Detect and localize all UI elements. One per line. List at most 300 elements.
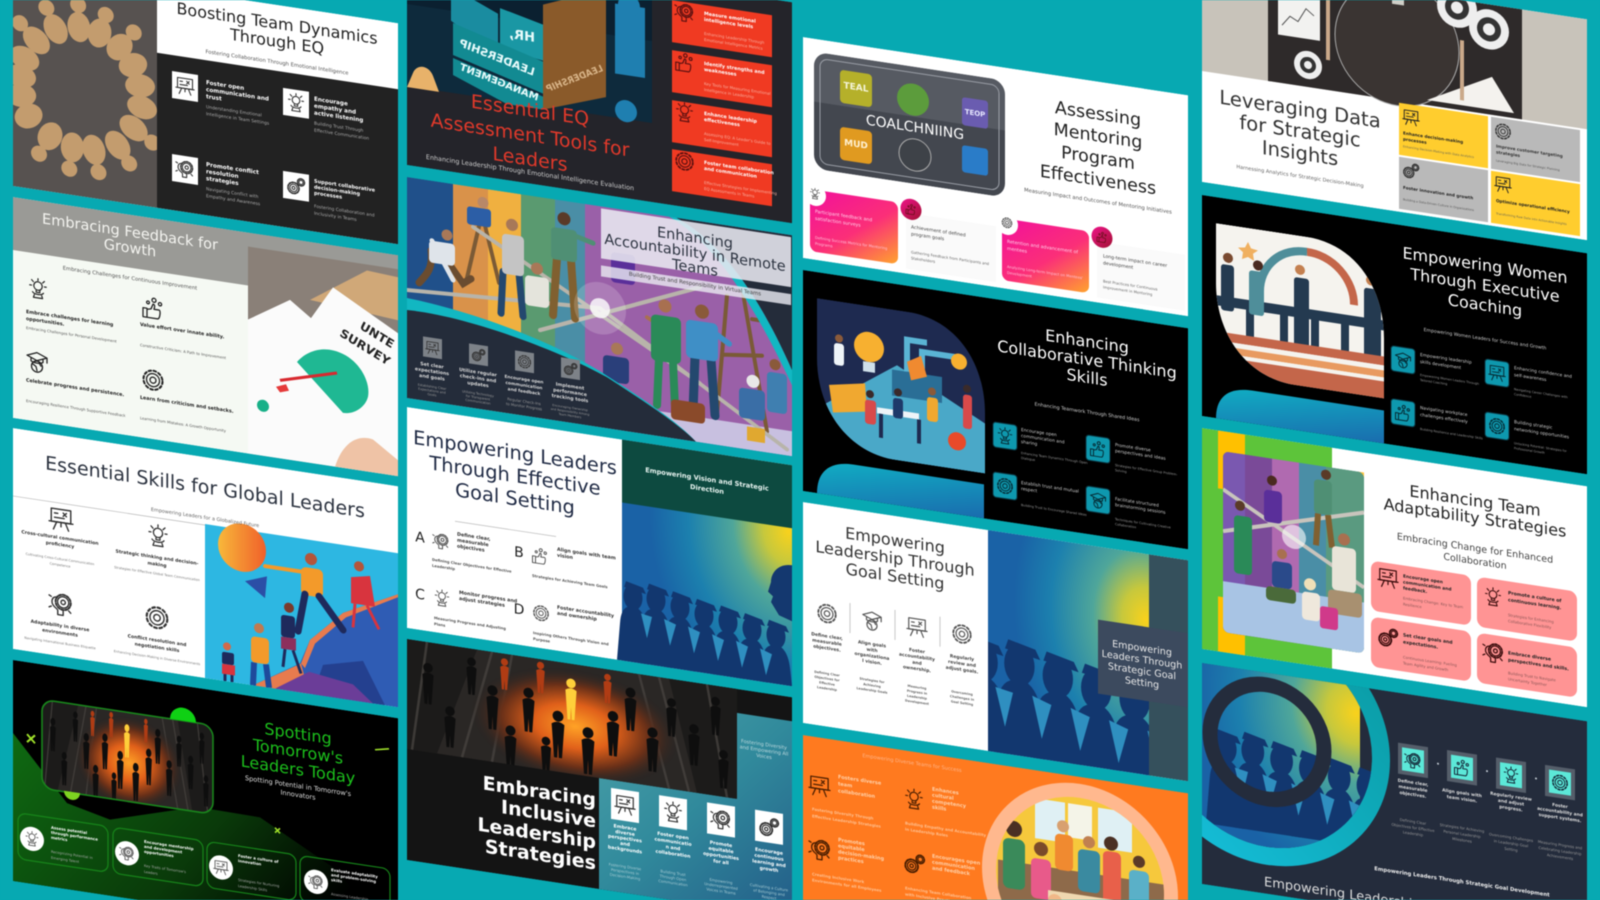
panel: Embracing Inclusive Leadership <box>407 639 792 900</box>
item A: Define clear, <box>457 531 491 542</box>
card 1: communication and <box>1403 579 1452 592</box>
title: Empowering <box>845 523 945 557</box>
card 3: Assessing EQ: A Leader's Guide to <box>704 130 771 146</box>
card 4: skills <box>331 877 343 883</box>
item 4: Goal Setting <box>951 699 974 707</box>
item C: Measuring Progress and Adjusting <box>434 616 506 631</box>
title: Leadership <box>477 812 596 853</box>
image: survey paper: SURVEY <box>338 326 393 368</box>
card 2: Strategies for Enhancing <box>1508 613 1554 624</box>
card 1: Recognizing Potential in <box>51 850 93 860</box>
image: ring with silhouettes <box>1153 611 1416 878</box>
item 1: Set clear <box>420 361 444 370</box>
step 4 <box>1537 764 1583 863</box>
title: Enhancing <box>1045 325 1129 357</box>
item 1: objectives. <box>813 643 841 653</box>
item 4 <box>750 809 789 900</box>
green header <box>622 440 792 528</box>
subtitle: Enhancing Teamwork Through Shared Ideas <box>1035 402 1140 423</box>
item D: and ownership <box>557 610 597 622</box>
card 3: Analyzing Long-term Impact on Mentees' <box>1007 265 1083 280</box>
item 2: Communication <box>465 398 491 406</box>
item 1: Embracing Challenges for Personal Development <box>26 326 117 344</box>
card 2: opportunities <box>144 848 174 858</box>
title: Skills <box>1066 364 1108 390</box>
item 1: Define clear, <box>811 631 843 642</box>
card 1: Embracing Change: Key to Team <box>1403 596 1463 610</box>
panel: dark body <box>157 53 398 244</box>
card 2: Stakeholders <box>911 256 935 264</box>
item 2: updates <box>467 380 489 389</box>
item C: C <box>415 586 425 604</box>
item 2: Solving <box>1115 468 1127 474</box>
item 2: check-ins and <box>460 373 496 384</box>
step 1: measurable <box>1399 783 1427 794</box>
step dots <box>1437 763 1537 780</box>
card 4: Foster team collaboration <box>704 159 774 176</box>
title: Through EQ <box>229 24 324 57</box>
item: collaborative decisions <box>283 171 376 225</box>
image: coaching board: COALCHNIING <box>866 113 964 143</box>
card 1 <box>672 0 772 57</box>
item: empathy: Effective Communication <box>314 127 369 141</box>
item 3: Celebrate progress and persistence. <box>26 377 124 398</box>
item 1 <box>608 787 642 882</box>
card 4 <box>1491 171 1580 236</box>
subtitle: Collaboration <box>1443 551 1507 572</box>
card 1: intelligence levels <box>704 16 753 30</box>
image: data board <box>1202 0 1587 134</box>
item B: Align goals with team <box>557 546 616 561</box>
card 3 <box>1371 617 1471 682</box>
title: Mentoring <box>1054 120 1142 153</box>
step 3: Overcoming Challenges <box>1489 832 1533 843</box>
item 1 <box>415 335 449 399</box>
item A: Defining Clear Objectives for Effective <box>432 558 512 574</box>
item 1: Cross-cultural communication <box>21 529 99 546</box>
item: collaborative decisions: decision-making <box>314 185 360 198</box>
card 3: Set clear goals and <box>1403 632 1453 645</box>
item 4: performance <box>553 387 587 398</box>
item 4: Professional Growth <box>1514 446 1545 455</box>
panel: Boosting Team Dynamics <box>4 0 398 244</box>
item 4: growth <box>760 865 778 874</box>
item 1: Leadership <box>817 685 838 692</box>
card 1 <box>804 182 898 264</box>
card 1: Enhancing Leadership Through <box>704 30 765 45</box>
item 3: and feedback <box>508 386 540 397</box>
item 4: and feedback <box>932 866 971 877</box>
card 3: Self-Improvement <box>704 136 739 147</box>
card 1: Emotional Intelligence Metrics <box>704 36 763 50</box>
title: Program <box>1061 143 1135 174</box>
item 1: Embrace <box>614 823 636 832</box>
step 4: Celebrating Leadership <box>1539 846 1582 856</box>
item 2 <box>459 342 498 407</box>
item D: Inspiring Others Through Vision and <box>533 631 609 647</box>
title panel: Teams <box>671 255 718 279</box>
card 2: and development <box>144 843 182 854</box>
item 2: with <box>866 646 878 654</box>
subtitle: Harnessing Analytics for Strategic Decision-Making <box>1236 164 1364 189</box>
item 1: Objectives for <box>814 675 840 683</box>
subtitle: Measuring Impact and Outcomes of Mentoring Initiatives <box>1024 187 1172 216</box>
item 1 <box>809 770 882 828</box>
yellow strip <box>1218 430 1245 656</box>
item: conflict resolution: strategies <box>206 176 239 187</box>
card 4: Evaluate adaptability <box>331 867 378 879</box>
card 4 <box>300 855 390 900</box>
item 4: negotiation skills <box>135 641 180 654</box>
card 4: Uncertainty Together <box>1508 677 1547 687</box>
item 4: communication <box>932 860 975 872</box>
panel: Essential Skills <box>13 428 398 707</box>
item 1: backgrounds <box>608 844 642 855</box>
step 2: team vision. <box>1447 794 1478 804</box>
card 3: Leadership Skills <box>238 884 267 892</box>
item 4: Encouraging Ownership <box>552 403 588 412</box>
title: Through Executive <box>1409 264 1560 306</box>
step 4: support systems. <box>1539 811 1582 824</box>
item 1: Tailored Coaching <box>1419 378 1447 386</box>
step 1: Objectives for Effective <box>1391 823 1435 833</box>
item 4 <box>114 601 200 666</box>
step 1: Define clear, <box>1398 777 1429 788</box>
card 2: continuous learning. <box>1508 597 1562 611</box>
item: open communication: Foster open <box>206 80 244 92</box>
subtitle: Embracing Challenges for Continuous Improvement <box>63 266 197 292</box>
item 4: Encourage <box>755 846 783 856</box>
item 1: Encourage open <box>1021 426 1057 438</box>
item 4: Overcoming <box>951 689 973 697</box>
panel: Empowering Leadership Through Goal Setting <box>803 502 1237 803</box>
item 3: Encouraging Resilience Through Supportive Feedback <box>26 399 126 418</box>
item 4: tracking tools <box>552 392 589 404</box>
card 1: Encourage open <box>1403 573 1443 585</box>
item 2: cultural <box>932 793 954 802</box>
item 1: Defining Clear <box>814 670 840 678</box>
item 2: Navigating Career Challenges with <box>1514 387 1568 399</box>
header text: Direction <box>690 483 724 496</box>
item 2: Strategies for Effective Global Team Communication <box>114 565 200 582</box>
card 2: Collaborative Flexibility <box>1508 619 1552 630</box>
item: empathy: Encourage <box>314 97 348 108</box>
image: HR cubes: LEADERSHIP <box>544 64 605 95</box>
panel: Empowering Leaders Through Effective Goal Setting <box>407 407 792 686</box>
divider <box>455 521 556 537</box>
card 3: Building a Data-Driven Culture in Organizations <box>1403 197 1474 212</box>
item 1: perspectives <box>608 833 642 844</box>
card 4 <box>1092 225 1185 311</box>
item 3: Establish trust and mutual <box>1021 479 1079 494</box>
title: Empowering Women <box>1402 243 1568 287</box>
title: Goal Setting <box>455 478 575 519</box>
card 3: Team Agility and Growth <box>1402 661 1449 672</box>
item: open communication: Understanding Emotional <box>206 104 262 118</box>
item 3: Foster <box>909 647 926 655</box>
title: Leadership Through <box>815 536 975 579</box>
item 1 <box>993 422 1088 470</box>
item 1: Fostering Diversity Through <box>812 806 874 820</box>
subtitle: Fostering Collaboration Through Emotional Intelligence <box>205 49 349 77</box>
card 3: Continuous Learning: Fueling <box>1403 655 1457 668</box>
item 1: and goals <box>419 372 445 382</box>
card 2: Key Tools for Measuring Emotional <box>704 80 771 95</box>
image: HR cubes <box>407 0 652 126</box>
item 3: Creating Inclusive Work <box>812 871 865 884</box>
item 2: collaboration <box>656 848 690 859</box>
card 4: development <box>1103 260 1133 270</box>
image: classroom in circle <box>982 769 1178 900</box>
title panel: Setting <box>1125 675 1159 691</box>
step 2: Align goals with <box>1442 787 1482 799</box>
item 1: Competence <box>50 562 70 569</box>
item 4: Collaboration <box>1115 522 1136 529</box>
card 4 <box>1477 633 1577 698</box>
item: empathy: empathy and <box>314 104 356 116</box>
item 2: Strategies for Effective Group Problem- <box>1115 463 1177 477</box>
header text: Empowering Vision and Strategic <box>645 466 769 493</box>
item: open communication <box>172 71 270 126</box>
item B <box>514 540 616 591</box>
item 1 <box>26 277 117 344</box>
card 4: Effective Strategies for Implementing <box>704 179 777 195</box>
card 3: Foster innovation and growth <box>1403 185 1473 200</box>
item: conflict resolution: resolution <box>206 169 239 180</box>
image: survey paper: UNTE <box>358 319 396 351</box>
card 4: Transforming Raw Data into Actionable Insights <box>1495 211 1567 226</box>
card 1: Participant feedback and <box>815 208 872 223</box>
item 1: Dialogue <box>1021 456 1035 462</box>
item 1: Decision-Making <box>610 873 641 881</box>
title: Effectiveness <box>1040 162 1156 199</box>
item 3: Promote <box>710 839 732 849</box>
item: conflict resolution <box>172 154 261 207</box>
item 2: Utilizing Technology <box>462 389 494 398</box>
panel: Spotting Tomorrow's Leaders <box>13 660 398 900</box>
item C: adjust strategies <box>459 595 505 608</box>
title: Through Effective <box>428 451 601 500</box>
item 3: Voices in Teams <box>706 887 736 896</box>
panel: Embracing Feedback <box>13 197 398 476</box>
image: coaching board: TEOP <box>965 107 985 119</box>
item 2: l vision. <box>862 657 882 666</box>
card 2: Intelligence in Leadership <box>704 86 754 99</box>
panel: Enhancing Accountability <box>407 177 792 456</box>
card 1: Enhancing Decision-Making with Data Analytics <box>1403 144 1474 159</box>
item 3: challenges effectively <box>1420 411 1468 425</box>
item 3 <box>899 616 935 707</box>
title: Embracing <box>483 771 596 811</box>
item 4: and Responsibility Among <box>551 407 589 417</box>
item 2: Enhances <box>932 787 959 797</box>
item 2 <box>114 518 200 582</box>
item 3: equitable <box>838 843 865 853</box>
item 4: continuous <box>754 852 784 862</box>
title: Leveraging Data <box>1219 85 1381 132</box>
image: HR cubes: LEADERSHIP <box>458 37 536 79</box>
item 1: Effective <box>819 680 836 687</box>
item 2: making <box>147 560 167 569</box>
card 2: program goals <box>911 231 945 242</box>
item 3: and <box>912 659 922 666</box>
tagline: Fostering Diversity <box>741 739 787 751</box>
step 3: Regularly review <box>1490 790 1532 802</box>
item 4: Conflict resolution and <box>128 633 186 648</box>
card 2: Identify strengths and <box>704 60 765 76</box>
title: Empowering Leaders <box>413 425 617 479</box>
item C <box>415 583 518 639</box>
title panel: Strategic Goal <box>1108 661 1176 682</box>
step 4: Measuring Progress and <box>1538 840 1583 851</box>
item D <box>514 598 615 653</box>
card 1: Programs <box>815 242 833 248</box>
item A: Leadership <box>432 564 455 571</box>
card 2: Gathering Feedback from Participants and <box>911 250 990 266</box>
item: collaborative decisions: Fostering Collaboration and <box>314 203 375 218</box>
step 4: accountability and <box>1537 805 1583 818</box>
item 3: Building Resilience and Leadership Skills <box>1420 427 1483 441</box>
item 3: environments <box>42 627 78 638</box>
image: climbers on a mountain <box>205 518 398 707</box>
divider and subtitle: Empowering Leaders for a Globalized Future <box>151 507 259 529</box>
title: Tomorrow's <box>252 735 343 767</box>
item 3: Progress in <box>907 689 928 696</box>
item 3: respect <box>1021 485 1038 494</box>
image: survey paper <box>248 233 398 476</box>
item 3 <box>24 589 96 650</box>
title: Inclusive <box>501 795 596 832</box>
image: crowd with glowing figure <box>407 639 737 809</box>
item 1: proficiency <box>46 539 74 550</box>
panel: Empowering Women <box>1202 195 1587 474</box>
card 1: metrics <box>51 834 68 842</box>
card 3 <box>996 211 1089 293</box>
item 3: Environments for all Employees <box>812 877 882 892</box>
teal blob <box>1216 385 1384 444</box>
item 1: sharing <box>1021 438 1038 447</box>
step 1 <box>1391 742 1435 839</box>
title: Collaborative Thinking <box>997 336 1177 382</box>
item 3 <box>993 472 1087 517</box>
item 2: Strategies for <box>860 677 885 684</box>
item 1 <box>1391 346 1479 391</box>
panel: Leveraging Data <box>1202 0 1587 240</box>
step 2: Milestones <box>1452 837 1472 844</box>
card 2: Leveraging Big Data for Strategic Planning <box>1496 158 1560 172</box>
card 4: perspectives and skills. <box>1508 657 1569 672</box>
card 2 <box>1477 577 1577 642</box>
card 3 <box>207 841 296 900</box>
card 3 <box>1399 157 1488 222</box>
step 3: progress. <box>1499 803 1523 813</box>
title panel <box>1098 620 1188 707</box>
title: for Strategic <box>1239 110 1361 151</box>
item: open communication: communication and <box>206 87 269 103</box>
item 3: Navigating International Business Etiquette <box>24 636 96 650</box>
item 3: for all <box>713 858 729 866</box>
card 3: effectiveness <box>704 116 740 128</box>
item 3: Encourage open <box>505 373 543 385</box>
card 3: Enhance leadership <box>704 110 757 124</box>
step 4: Achievements <box>1547 853 1573 861</box>
item 3: Navigating workplace <box>1420 404 1468 418</box>
title panel: Building Trust and Responsibility in Virtual Teams <box>629 272 761 298</box>
item: empathy: active listening <box>314 111 363 124</box>
item 3 <box>26 351 126 418</box>
item 3: practices <box>838 855 864 865</box>
image: coaching board <box>814 52 1005 198</box>
card 1 <box>1399 103 1488 168</box>
card 2: Promote a culture of <box>1508 590 1562 604</box>
subtitle: Empowering Diverse Teams for Success <box>862 753 962 774</box>
step 4: Foster <box>1552 801 1569 810</box>
card 2: Achievement of defined <box>911 224 966 238</box>
card 3: mentees <box>1007 245 1028 254</box>
item 2: Constructive Criticism: A Path to Improvement <box>140 343 226 360</box>
item 2: n and <box>666 844 680 852</box>
item 1: Cultivating Cross-Cultural Communication <box>26 552 94 566</box>
item 2: Strategic thinking and decision- <box>116 548 199 567</box>
item 2: organizationa <box>855 650 889 662</box>
item 4: Implement <box>556 381 585 391</box>
item 4: Facilitate structured <box>1115 496 1159 508</box>
item 2: Confidence <box>1514 392 1531 399</box>
item 2: Achieving <box>863 682 881 689</box>
title panel: Enhancing <box>657 223 733 252</box>
item 3: Leadership <box>907 694 928 701</box>
item 3 <box>703 802 739 896</box>
item 2: Foster open <box>657 830 689 841</box>
card 1: Defining Success Metrics for Mentoring <box>815 236 888 251</box>
step 3: Setting <box>1504 847 1518 853</box>
item 3: equitable <box>708 845 734 855</box>
item 4 <box>140 369 234 434</box>
title: Enhancing Team <box>1409 481 1541 520</box>
item 3: Measuring <box>908 684 927 691</box>
item 4: Building strategic <box>1514 419 1553 431</box>
item D: Foster accountability <box>557 604 615 619</box>
item 2: skills <box>932 805 946 813</box>
title panel: Leaders Through <box>1102 648 1182 671</box>
item 1: Enhancing Team Dynamics Through Open <box>1021 451 1088 465</box>
item 3: Promotes <box>838 837 865 847</box>
title: Growth <box>104 235 156 260</box>
panel: Enhancing Collaborative Thinking <box>803 270 1188 549</box>
card 4: Improvement in Mentoring <box>1103 285 1153 297</box>
item: collaborative decisions: processes <box>314 191 342 201</box>
item 2 <box>140 296 226 360</box>
item 3 <box>1391 399 1483 441</box>
item D: D <box>514 601 524 619</box>
item 2: perspectives and ideas <box>1115 448 1166 461</box>
step 2 <box>1440 749 1485 846</box>
image: HR cubes: MANAGEMENT <box>458 62 539 104</box>
title: Assessing <box>1055 98 1141 131</box>
title: Embracing Feedback for <box>42 210 218 253</box>
step 1: objectives. <box>1400 789 1427 799</box>
step 1: Defining Clear <box>1400 818 1427 826</box>
item 2: Align goals <box>858 639 886 649</box>
teal gradient panel <box>599 692 792 900</box>
item C: Plans <box>434 622 446 628</box>
step 3 <box>1489 756 1533 855</box>
item 4: learning and <box>752 858 786 869</box>
item 2: competency <box>932 799 967 810</box>
image: wooden figures in a circle <box>4 0 165 209</box>
item 2: Building Trust <box>660 869 686 877</box>
image: crowd in frame <box>26 700 390 834</box>
